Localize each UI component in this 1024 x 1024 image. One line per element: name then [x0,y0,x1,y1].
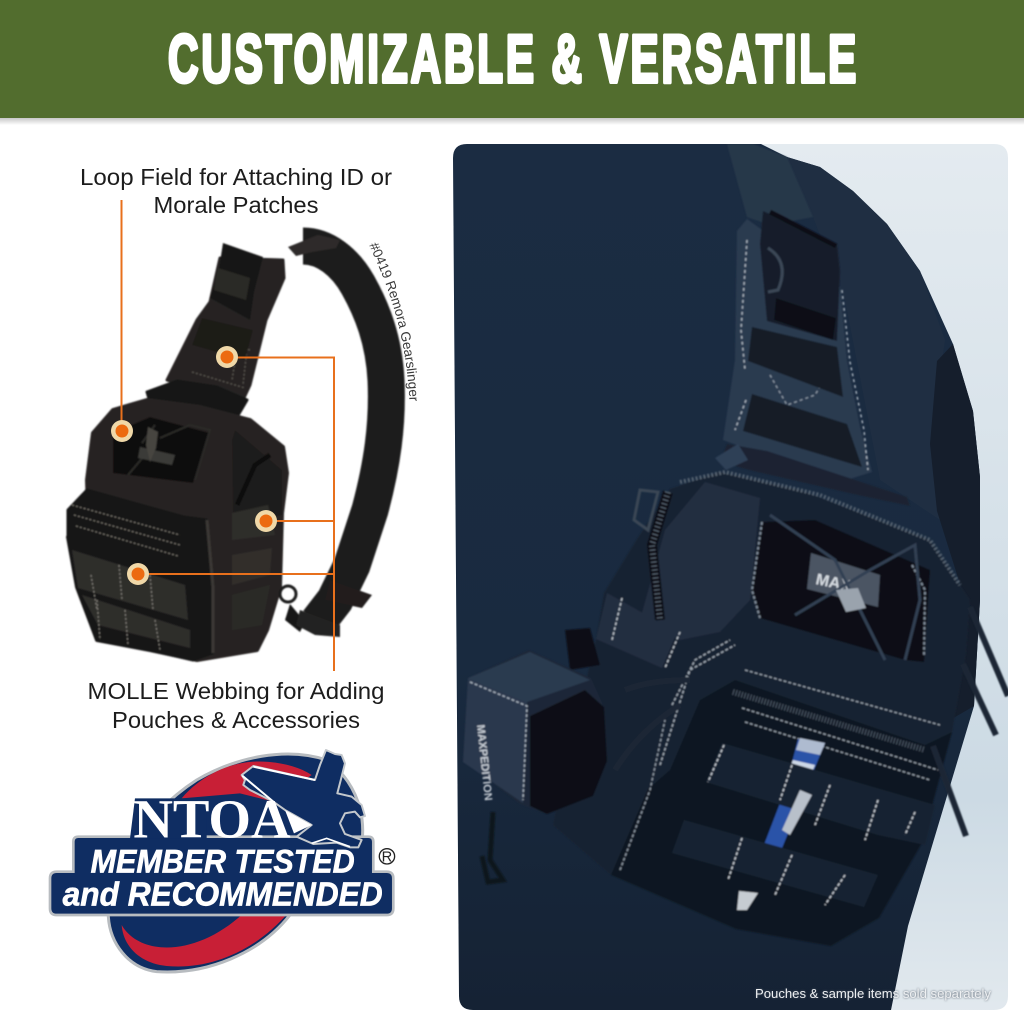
pouch label: MAXPEDITION [474,724,494,801]
bag body [68,400,287,660]
person torso [450,140,980,1015]
zipper [237,455,270,505]
side clip [565,628,600,670]
bag rear body [553,472,970,946]
handle [720,444,910,506]
red swoosh bottom [122,913,288,967]
pen clip [782,790,812,835]
and recommended: and RECOMMENDED [63,877,383,914]
member tested: MEMBER TESTED [91,844,355,880]
front pocket [68,490,213,660]
lower bag seam [620,720,665,870]
shoulder sleeve light panel [787,157,921,273]
side webbing [596,593,677,668]
registered mark: R [382,850,392,866]
product photo: Remora Gearslinger bag [68,235,386,660]
strap buckle [760,211,840,341]
front pocket [610,680,952,946]
D ring [634,490,658,530]
upper bag panel shading [640,482,760,640]
callout marker: strap webbing [216,346,238,368]
webbing row upper [706,743,935,845]
header banner [0,0,1024,125]
top handle [147,381,247,417]
loop field patch [113,417,210,483]
webbing on strap [748,327,843,397]
callout marker: side webbing [255,510,277,532]
clip and lower strap webbing [280,586,296,602]
name band [50,837,393,915]
eagle [242,750,365,847]
MOLLE webbing rows [72,550,188,620]
registered mark [379,849,395,866]
side release buckle [210,243,263,320]
side pouch [463,650,607,814]
title: CUSTOMIZABLE & VERSATILE [168,21,856,96]
shock cord [770,515,920,660]
pen [762,739,825,853]
callout text: pouches and accessories: Pouches & Accessories [112,707,360,733]
upper padded strap [167,258,284,400]
callout text: MOLLE webbing: MOLLE Webbing for Adding [88,678,384,704]
vertical zipper [652,492,668,620]
NTOA wordmark: NTOA [133,789,291,850]
callout marker: loop field [111,420,133,442]
callout marker: front webbing [127,563,149,585]
pocket zipper [733,692,925,750]
callout text: morale patches: Morale Patches [154,192,318,218]
callout text: loop field: Loop Field for Attaching ID or [80,164,392,190]
padded shoulder strap [463,144,1008,946]
lower strap [482,812,503,882]
top zipper [680,472,960,585]
oval [108,754,363,972]
lifestyle photo panel [450,140,1010,1015]
patch panel [752,520,930,662]
product code label: #0419 Remora Gearslinger [369,242,417,401]
dark sleeve side [930,344,980,720]
footnote: Pouches & sample items sold separately [755,987,992,1001]
NTOA badge [50,750,395,972]
callout leader lines [122,200,334,671]
red swoosh top [182,762,312,802]
pull cords [615,607,1008,836]
brand label [807,553,880,607]
webbing row lower [672,820,878,907]
backdrop [450,140,1010,1015]
padded shoulder strap: MAX [814,571,853,595]
shoulder strap loop [303,246,386,622]
